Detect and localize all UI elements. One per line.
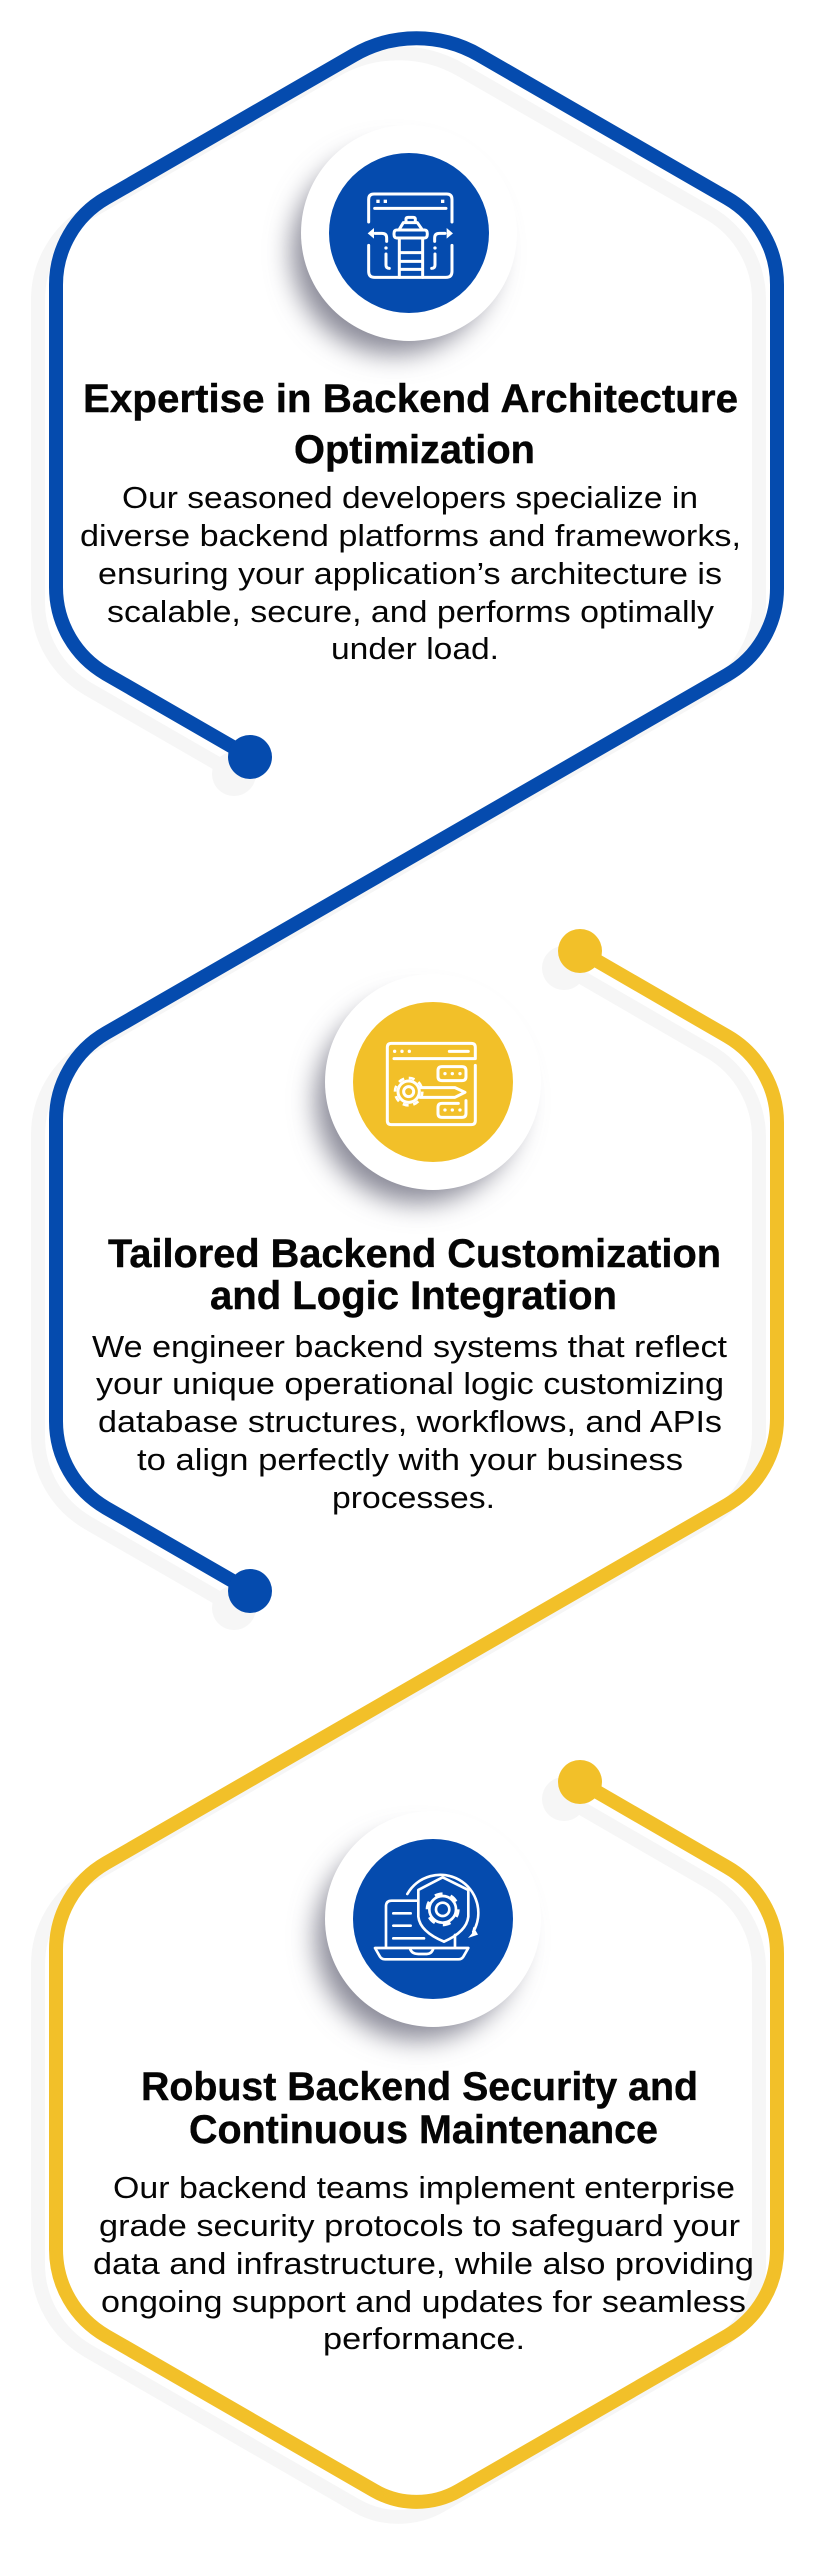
blue connector line <box>56 38 777 1613</box>
body text: database structures, workflows, and APIs <box>98 1404 722 1439</box>
heading <box>83 377 738 472</box>
heading: Robust Backend Security and <box>141 2065 698 2109</box>
body text: Our seasoned developers specialize in <box>122 480 698 515</box>
body text: to align perfectly with your business <box>137 1442 683 1477</box>
panel: backend customization <box>92 974 727 1515</box>
heading <box>141 2065 698 2152</box>
heading: Tailored Backend Customization <box>108 1232 721 1276</box>
heading: and Logic Integration <box>210 1274 617 1318</box>
body text: ensuring your application’s architecture is <box>98 556 722 591</box>
body text <box>93 2170 754 2356</box>
icon: architecture tower <box>292 125 517 354</box>
body text: grade security protocols to safeguard your <box>99 2208 740 2243</box>
body text <box>92 1329 727 1515</box>
heading: Optimization <box>294 428 535 472</box>
heading: Continuous Maintenance <box>189 2108 658 2152</box>
body text: ongoing support and updates for seamless <box>101 2284 746 2319</box>
body text: diverse backend platforms and frameworks, <box>80 518 741 553</box>
panel: backend security <box>93 1811 754 2356</box>
body text: Our backend teams implement enterprise <box>113 2170 735 2205</box>
body text: performance. <box>323 2321 525 2356</box>
body text: processes. <box>332 1480 495 1515</box>
body text: data and infrastructure, while also providing <box>93 2246 754 2281</box>
body text: We engineer backend systems that reflect <box>92 1329 727 1364</box>
body text: scalable, secure, and performs optimally <box>107 594 715 629</box>
yellow connector line <box>56 929 777 2502</box>
heading: Expertise in Backend Architecture <box>83 377 738 421</box>
panel: backend architecture <box>80 125 741 666</box>
icon: laptop with security shield <box>316 1811 541 2040</box>
icon: logic window with gear <box>316 974 541 1203</box>
body text: under load. <box>331 631 499 666</box>
heading <box>108 1232 721 1318</box>
body text <box>80 480 741 666</box>
body text: your unique operational logic customizing <box>96 1366 724 1401</box>
